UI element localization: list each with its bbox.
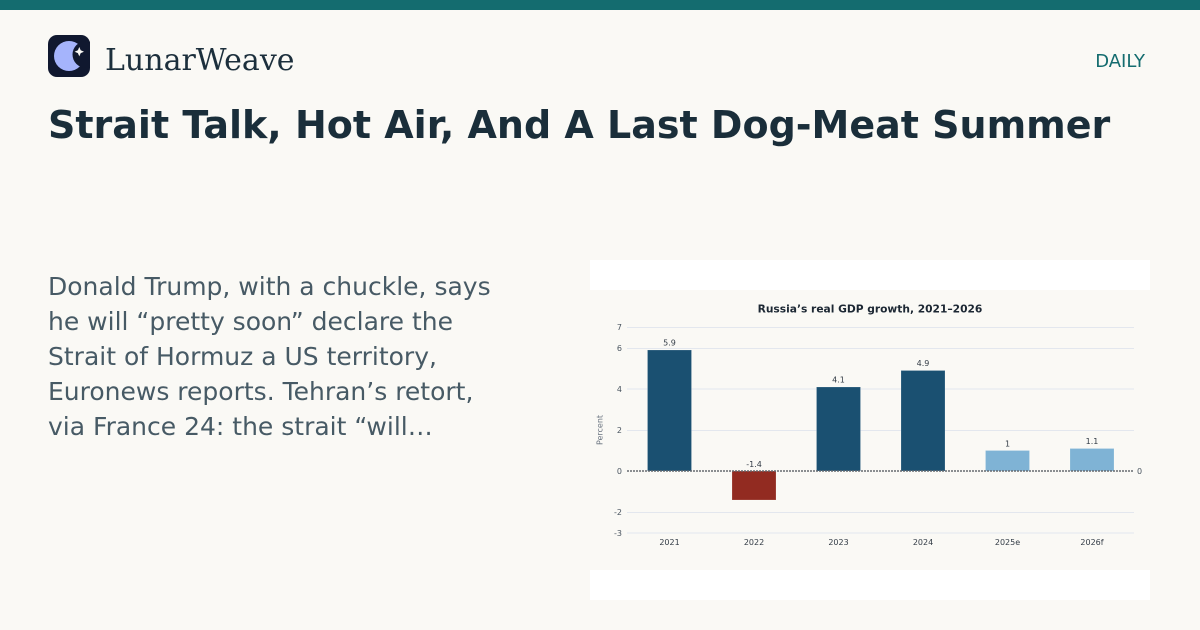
bars	[648, 350, 1114, 500]
brand name: LunarWeave	[105, 42, 295, 78]
summary text	[48, 272, 491, 441]
y axis labels: 4	[617, 385, 622, 394]
panel: image top strip	[590, 260, 1150, 290]
bar value labels	[663, 338, 1098, 469]
summary text: he will “pretty soon” declare the	[48, 307, 453, 336]
top accent bar	[0, 0, 1200, 10]
bar value labels: 1	[1005, 440, 1010, 448]
panel: image bottom strip	[590, 570, 1150, 600]
x axis labels	[659, 538, 1104, 547]
y axis labels: 2	[617, 426, 622, 435]
y axis labels: -2	[614, 508, 622, 517]
bar value labels: 5.9	[663, 338, 676, 348]
zero line	[627, 470, 1134, 472]
y axis labels: 0	[617, 467, 622, 476]
bar value labels: 1.1	[1086, 437, 1098, 446]
chart title: Russia’s real GDP growth, 2021–2026	[758, 302, 982, 316]
summary text: Strait of Hormuz a US territory,	[48, 342, 437, 371]
summary text: Euronews reports. Tehran’s retort,	[48, 377, 473, 406]
x axis labels: 2026f	[1080, 538, 1104, 547]
bar value labels: 4.9	[917, 359, 929, 368]
section label: DAILY	[1095, 51, 1145, 72]
bar value labels: 4.1	[832, 376, 845, 384]
y axis title: Percent	[596, 415, 604, 445]
y axis labels: 7	[617, 323, 622, 332]
x axis labels: 2024	[913, 538, 933, 547]
title: Strait Talk, Hot Air, And A Last Dog-Meat Summer	[48, 103, 1110, 147]
bar chart: Russia's real GDP growth	[596, 302, 1142, 547]
icon: crescent moon logo	[48, 35, 90, 77]
x axis labels: 2022	[744, 538, 764, 547]
y axis labels	[614, 323, 622, 538]
summary text: via France 24: the strait “will…	[48, 412, 433, 441]
bar value labels: -1.4	[746, 460, 762, 469]
x axis labels: 2023	[828, 538, 849, 547]
summary text: Donald Trump, with a chuckle, says	[48, 272, 491, 301]
y axis labels: 6	[617, 344, 622, 353]
y axis labels: -3	[614, 529, 622, 538]
right axis zero label: 0	[1137, 467, 1142, 476]
x axis labels: 2021	[659, 538, 680, 547]
x axis labels: 2025e	[995, 538, 1020, 547]
